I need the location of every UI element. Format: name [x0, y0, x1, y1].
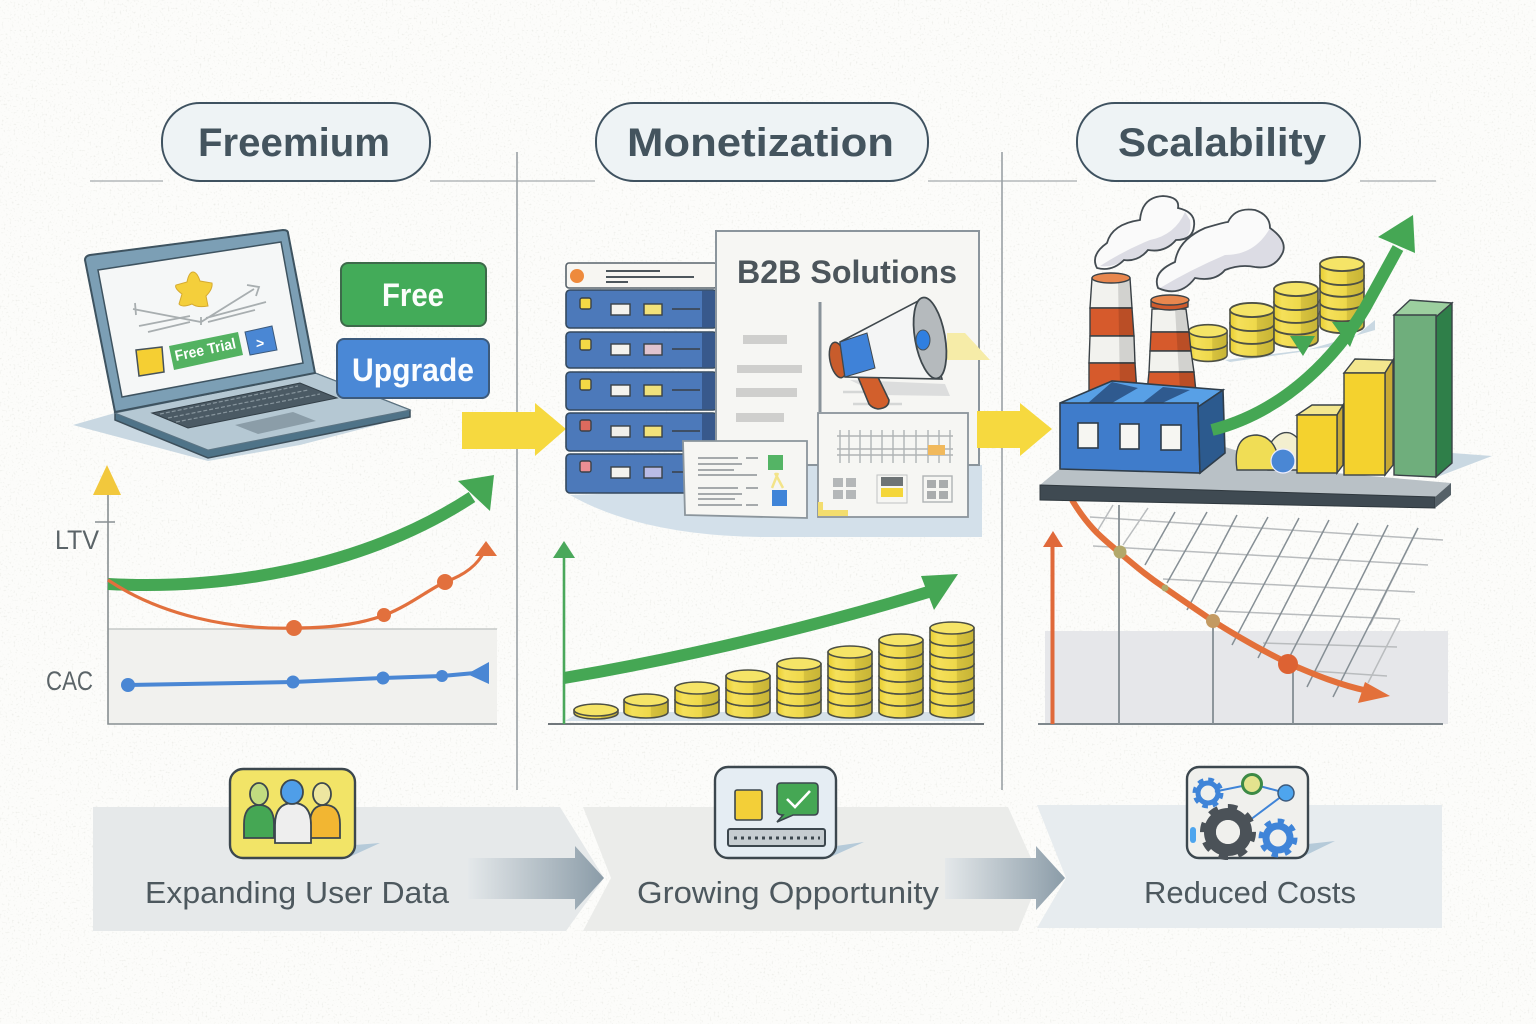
- heading pill: Freemium: [162, 103, 430, 181]
- platform: [1040, 447, 1492, 508]
- panel: Monetization: [548, 103, 990, 910]
- clouds: [1095, 196, 1284, 291]
- CAC line: [121, 662, 489, 692]
- icon: server rack: [566, 263, 717, 493]
- growth arrow: [1212, 215, 1415, 430]
- text: Growing Opportunity: Growing Opportunity: [637, 875, 940, 910]
- icon: laptop with free trial screen: >: [256, 335, 264, 351]
- arrow: bottom band two: [945, 846, 1065, 910]
- illustration: factory with growth: [1040, 196, 1492, 508]
- label: LTV: LTV: [55, 525, 99, 555]
- icon: laptop with free trial screen: Free Trial: [173, 335, 237, 365]
- text: Expanding User Data: Expanding User Data: [145, 875, 450, 910]
- large gear: [1204, 808, 1252, 856]
- icon: laptop with free trial screen: [73, 230, 412, 461]
- line chart: LTV and CAC: [46, 465, 497, 724]
- factory building: [1060, 381, 1225, 473]
- document: B2B Solutions: B2B Solutions: [737, 254, 957, 290]
- panel: Freemium: [46, 103, 497, 910]
- icon: star: [176, 272, 212, 307]
- icon: users: [230, 769, 380, 859]
- heading pill: Monetization: Monetization: [627, 121, 894, 165]
- heading pill: Scalability: [1077, 103, 1360, 181]
- document: small report: [683, 441, 807, 518]
- chimneys: [1089, 273, 1196, 392]
- growth arrow: [564, 574, 958, 678]
- panel: Scalability: [1038, 103, 1492, 910]
- axis arrow: [93, 465, 121, 495]
- text: Reduced Costs: Reduced Costs: [1144, 875, 1356, 910]
- icon: presentation screen: [715, 767, 864, 859]
- button: Upgrade: Upgrade: [352, 352, 474, 388]
- label: CAC: CAC: [46, 666, 93, 696]
- baseline and axis: [548, 723, 984, 725]
- coin stacks: [1189, 257, 1375, 362]
- heading pill: Scalability: Scalability: [1118, 121, 1327, 165]
- blobs: [1236, 433, 1300, 473]
- heading pill: Monetization: [596, 103, 928, 181]
- blue gear: [1262, 822, 1294, 854]
- red line: [108, 541, 497, 636]
- bottom band: three chevron panels: [93, 805, 1442, 931]
- heading pill: Freemium: Freemium: [198, 121, 390, 165]
- chart: declining cost curve: [1038, 500, 1448, 724]
- icon: megaphone: [826, 295, 990, 409]
- button: Upgrade: [337, 339, 489, 398]
- 3D bars: [1297, 300, 1452, 477]
- chart: growing coin stacks: [548, 541, 984, 724]
- arrow: Monetization to Scalability: [977, 403, 1052, 456]
- arrow: Freemium to Monetization: [462, 403, 566, 456]
- icon: gears and nodes: [1187, 767, 1335, 859]
- button: Free: [341, 263, 486, 326]
- small gear: [1196, 781, 1220, 805]
- arrow: bottom band one: [468, 846, 604, 910]
- button: Free: Free: [382, 277, 444, 313]
- document: B2B Solutions: [716, 231, 979, 465]
- shadow under illustration: [570, 465, 982, 537]
- document: dashboard grid: [818, 413, 968, 517]
- LTV line: [108, 475, 494, 585]
